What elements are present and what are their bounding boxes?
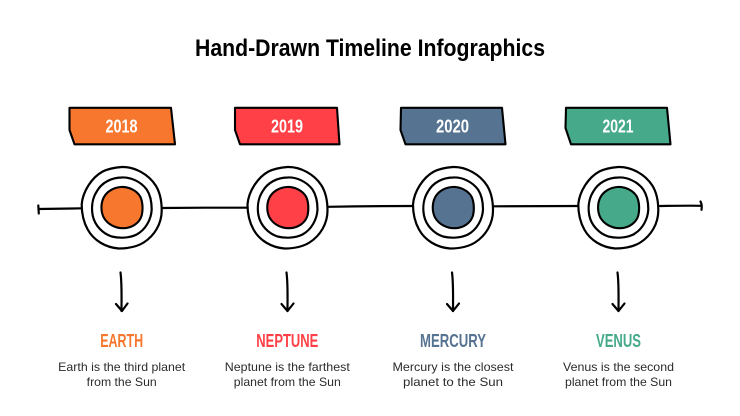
description: Venus: Venus is the second [563,360,674,374]
description line 2: Earth: from the Sun [87,375,157,389]
target node: Neptune [248,167,328,248]
year flag: 2021 [566,108,670,144]
description line 2: Venus: planet from the Sun [565,375,672,389]
year flag: 2020: 2020 [436,117,469,137]
title: Hand-Drawn Timeline Infographics [195,35,545,62]
column: Venus 2021 [563,108,674,389]
year flag: 2019: 2019 [271,117,303,137]
column: Neptune 2019 [225,108,350,389]
target node: Earth [82,167,162,248]
timeline line [38,202,702,214]
year flag: 2018 [70,108,175,144]
heading: VENUS: VENUS [596,331,641,351]
year flag: 2021: 2021 [602,117,634,137]
target node: Mercury [413,167,493,248]
description: Neptune: Neptune is the farthest [225,360,350,374]
year flag: 2020 [400,108,506,144]
description line 2: Neptune: planet from the Sun [234,375,341,389]
column: Mercury 2020 [392,108,514,389]
heading: EARTH: EARTH [100,331,143,351]
year flag: 2018: 2018 [106,117,138,137]
description line 2: Mercury: planet to the Sun [403,375,503,389]
arrow down [447,272,459,311]
column: Earth 2018 [58,108,186,389]
arrow down [116,272,128,311]
description: Mercury: Mercury is the closest [392,360,514,374]
year flag: 2019 [235,108,340,144]
target node: Venus [578,167,658,248]
heading: NEPTUNE: NEPTUNE [256,331,318,351]
heading: MERCURY: MERCURY [420,331,486,351]
arrow down [612,272,624,311]
description: Earth: Earth is the third planet [58,360,186,374]
arrow down [282,272,294,311]
